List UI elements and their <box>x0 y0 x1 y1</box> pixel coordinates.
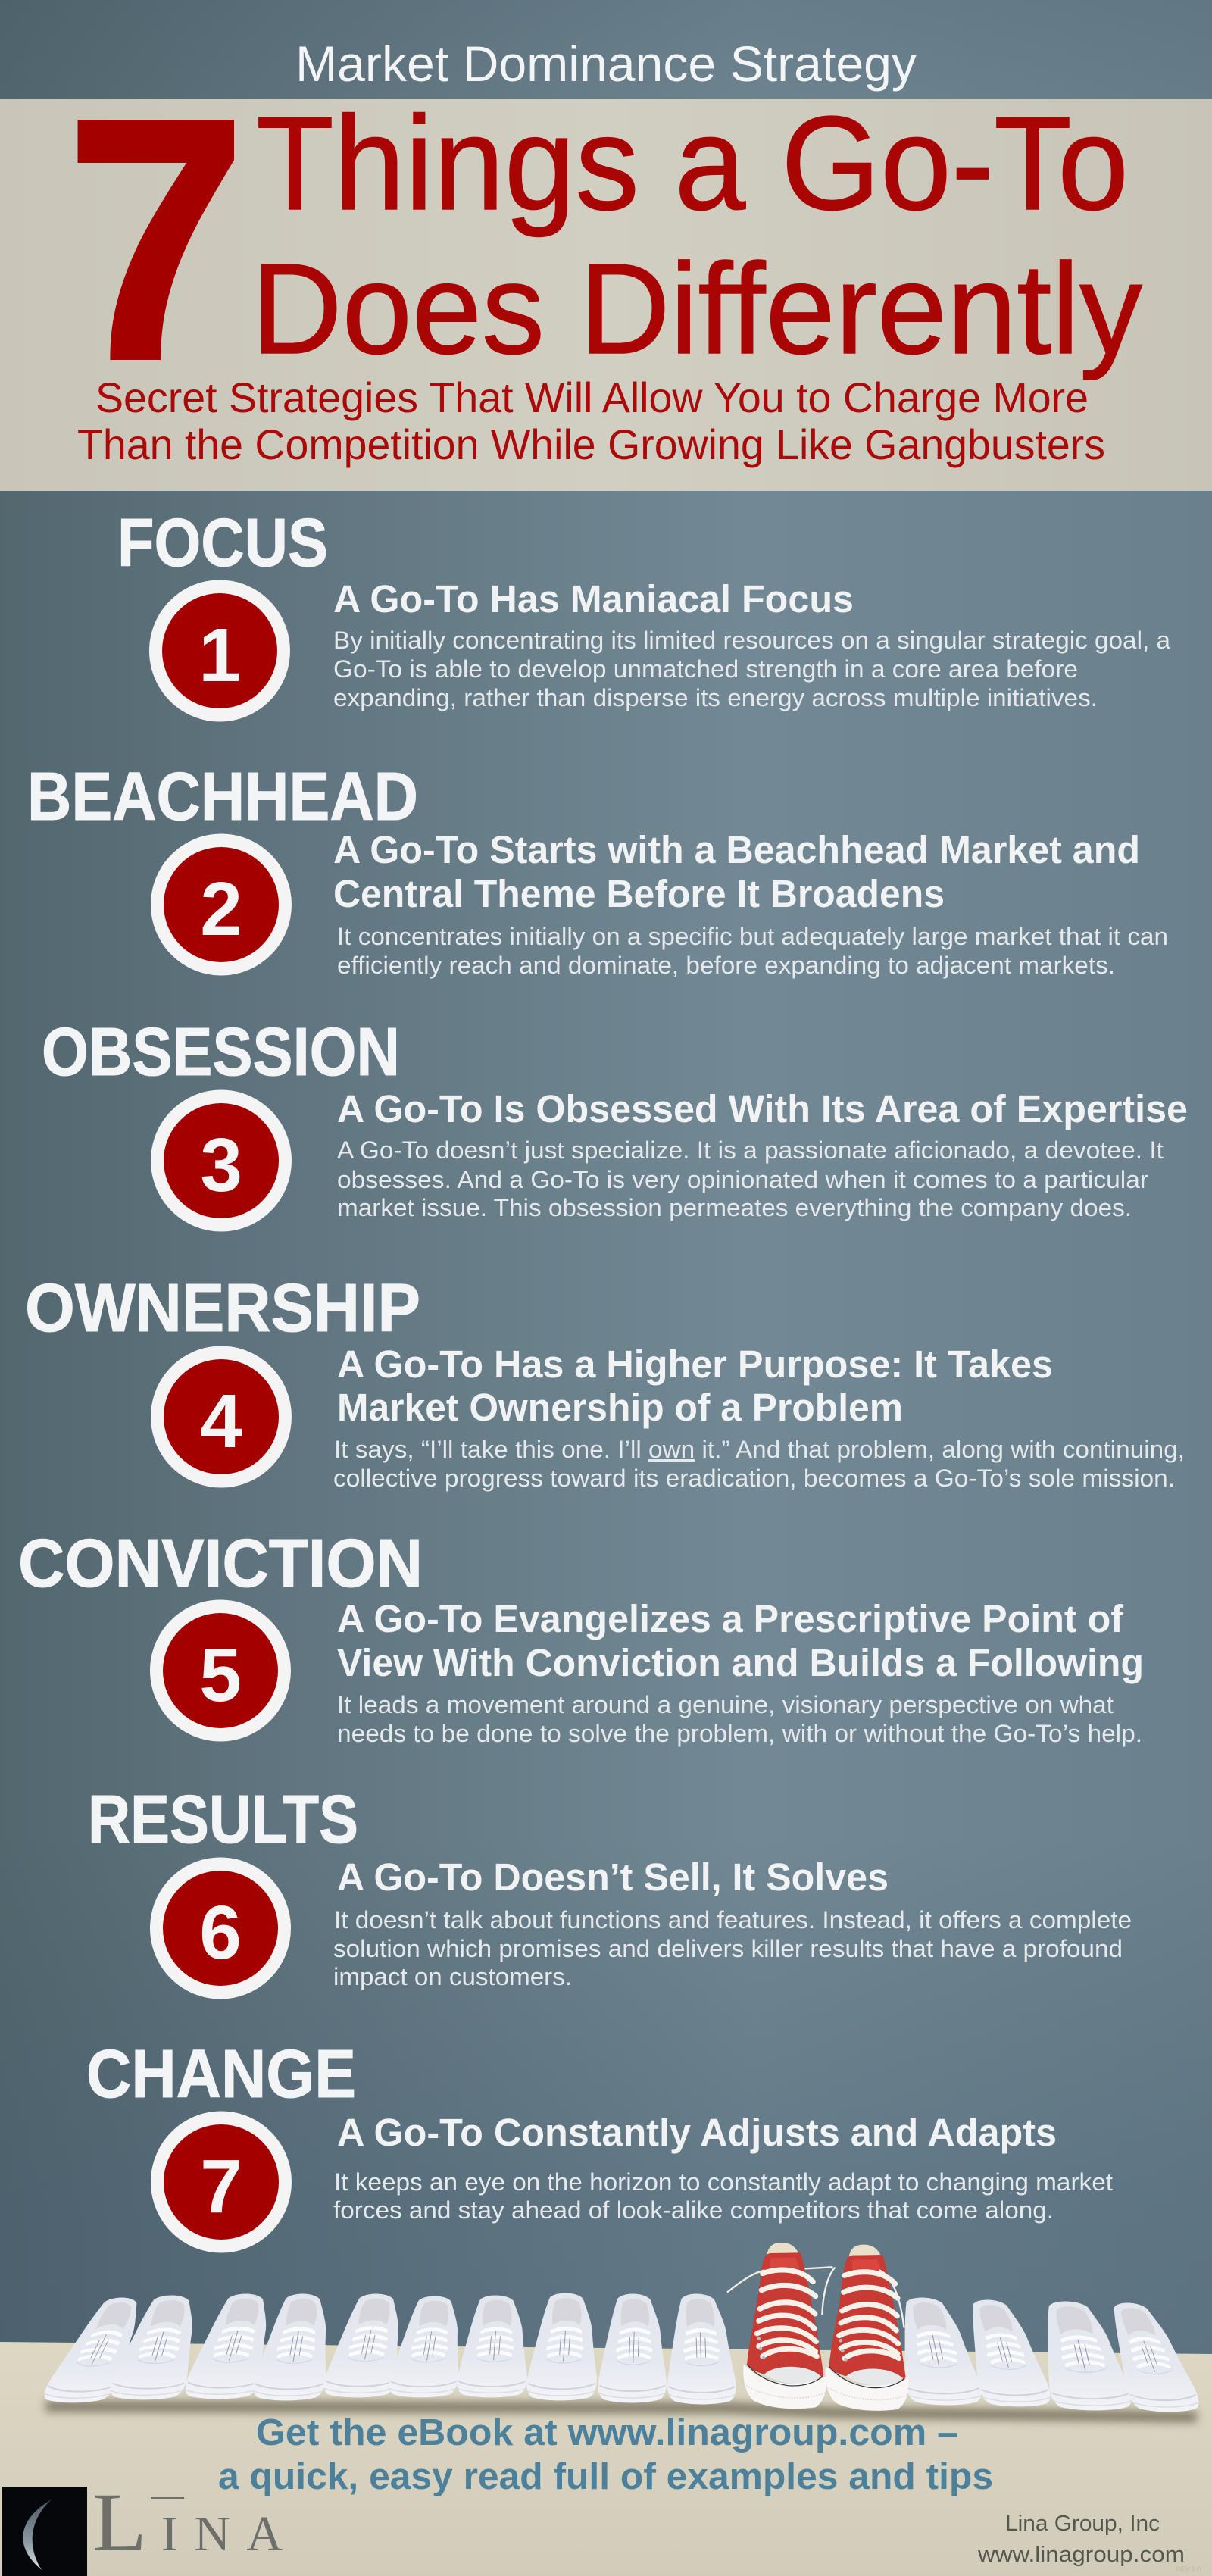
body 5 <box>337 1691 1142 1747</box>
keyword: FOCUS: FOCUS <box>117 505 328 581</box>
title: Does Differently: Does Differently <box>251 237 1142 381</box>
body 1: expanding, rather than disperse its energy across multiple initiatives. <box>333 684 1098 711</box>
number badge 2 <box>151 833 292 976</box>
call to action: Get the eBook at www.linagroup.com – <box>256 2412 958 2453</box>
body 5: It leads a movement around a genuine, visionary perspective on what <box>337 1691 1114 1718</box>
body 6: solution which promises and delivers killer results that have a profound <box>333 1935 1123 1962</box>
panel: item 5 conviction <box>18 1526 1144 1747</box>
red high-top shoes <box>728 2243 908 2411</box>
panel: item 6 results <box>88 1782 1132 1999</box>
heading 5: A Go-To Evangelizes a Prescriptive Point of <box>337 1597 1124 1640</box>
tagline line 2: Than the Competition While Growing Like Gangbusters <box>77 420 1105 468</box>
keyword: RESULTS: RESULTS <box>88 1782 358 1858</box>
body 2: It concentrates initially on a specific but adequately large market that it can <box>337 923 1168 950</box>
panel: item 1 focus <box>117 505 1171 721</box>
number badge 3 <box>151 1089 292 1232</box>
number badge 2: 2 <box>200 867 242 952</box>
number badge 6 <box>150 1858 291 1999</box>
body 7 <box>333 2168 1113 2224</box>
body 6: impact on customers. <box>333 1963 572 1990</box>
number badge 1 <box>149 580 290 721</box>
logo: Lina <box>2 2476 283 2576</box>
body 6: It doesn’t talk about functions and features. Instead, it offers a complete <box>334 1906 1132 1934</box>
number badge 1: 1 <box>198 613 241 698</box>
number badge 4: 4 <box>200 1379 242 1464</box>
number badge 7 <box>151 2111 292 2253</box>
panel: item 2 beachhead <box>27 759 1168 979</box>
icon: crescent moon <box>2 2487 87 2576</box>
keyword: CHANGE: CHANGE <box>86 2037 356 2112</box>
heading 4: A Go-To Has a Higher Purpose: It Takes <box>337 1343 1053 1386</box>
number badge 6: 6 <box>199 1890 242 1975</box>
heading 2 <box>333 828 1140 915</box>
panel: item 4 ownership <box>25 1271 1185 1492</box>
number badge 3: 3 <box>200 1123 242 1208</box>
body 4 <box>333 1436 1185 1492</box>
keyword: OWNERSHIP: OWNERSHIP <box>25 1271 420 1346</box>
wordmark <box>92 2476 283 2568</box>
body 1: Go-To is able to develop unmatched strength in a core area before <box>333 655 1078 683</box>
body 3: market issue. This obsession permeates everything the company does. <box>337 1194 1132 1221</box>
heading 4 <box>337 1343 1053 1429</box>
keyword: BEACHHEAD: BEACHHEAD <box>27 759 418 835</box>
body 4: It says, “I’ll take this one. I’ll own it.” And that problem, along with continuing, <box>334 1436 1185 1463</box>
body 6 <box>333 1906 1132 1990</box>
body 1 <box>333 627 1171 711</box>
number badge 5: 5 <box>199 1633 242 1718</box>
body 7: It keeps an eye on the horizon to constantly adapt to changing market <box>334 2168 1113 2196</box>
big numeral 7: 7 <box>66 48 246 430</box>
keyword: CONVICTION: CONVICTION <box>18 1526 423 1602</box>
body 3 <box>337 1136 1164 1221</box>
title: Things a Go-To: Things a Go-To <box>256 89 1129 238</box>
body 2: efficiently reach and dominate, before expanding to adjacent markets. <box>337 952 1115 979</box>
heading 7: A Go-To Constantly Adjusts and Adapts <box>337 2111 1057 2154</box>
wordmark: L <box>92 2476 147 2568</box>
heading 5: View With Conviction and Builds a Following <box>337 1641 1144 1684</box>
body 5: needs to be done to solve the problem, with or without the Go-To’s help. <box>337 1720 1142 1747</box>
number badge 5 <box>150 1600 291 1741</box>
subtitle: Market Dominance Strategy: Market Dominance Strategy <box>295 36 917 92</box>
body 1: By initially concentrating its limited resources on a singular strategic goal, a <box>333 627 1171 654</box>
call to action <box>218 2412 993 2497</box>
heading 5 <box>337 1597 1144 1684</box>
heading 1: A Go-To Has Maniacal Focus <box>333 577 854 621</box>
body 3: obsesses. And a Go-To is very opinionated when it comes to a particular <box>337 1166 1148 1193</box>
body 2 <box>337 923 1168 979</box>
body 7: forces and stay ahead of look-alike competitors that come along. <box>333 2196 1054 2224</box>
body 4: collective progress toward its eradication, becomes a Go-To’s sole mission. <box>333 1465 1175 1492</box>
number badge 4 <box>151 1346 292 1488</box>
company contact <box>977 2512 1201 2573</box>
illustration: row of white shoes with red high-tops <box>39 2243 1204 2417</box>
tagline line 1: Secret Strategies That Will Allow You to Charge More <box>95 374 1089 421</box>
floor <box>0 2342 1212 2576</box>
heading 2: Central Theme Before It Broadens <box>333 872 945 915</box>
heading 2: A Go-To Starts with a Beachhead Market and <box>333 828 1140 871</box>
heading 4: Market Ownership of a Problem <box>337 1386 903 1429</box>
number badge 7: 7 <box>200 2144 242 2229</box>
panel: item 7 change <box>86 2037 1113 2253</box>
heading 6: A Go-To Doesn’t Sell, It Solves <box>337 1855 889 1899</box>
wordmark: INA <box>161 2506 283 2562</box>
panel: item 3 obsession <box>42 1014 1188 1232</box>
call to action: a quick, easy read full of examples and tips <box>218 2456 993 2497</box>
heading 3: A Go-To Is Obsessed With Its Area of Expertise <box>337 1087 1188 1130</box>
keyword: OBSESSION: OBSESSION <box>42 1014 400 1090</box>
body 3: A Go-To doesn’t just specialize. It is a passionate aficionado, a devotee. It <box>337 1136 1164 1164</box>
company contact: REV 1.0 <box>1176 2565 1201 2573</box>
panel: title band <box>0 48 1212 491</box>
company contact: Lina Group, Inc <box>1005 2512 1160 2536</box>
company contact: www.linagroup.com <box>977 2543 1185 2567</box>
